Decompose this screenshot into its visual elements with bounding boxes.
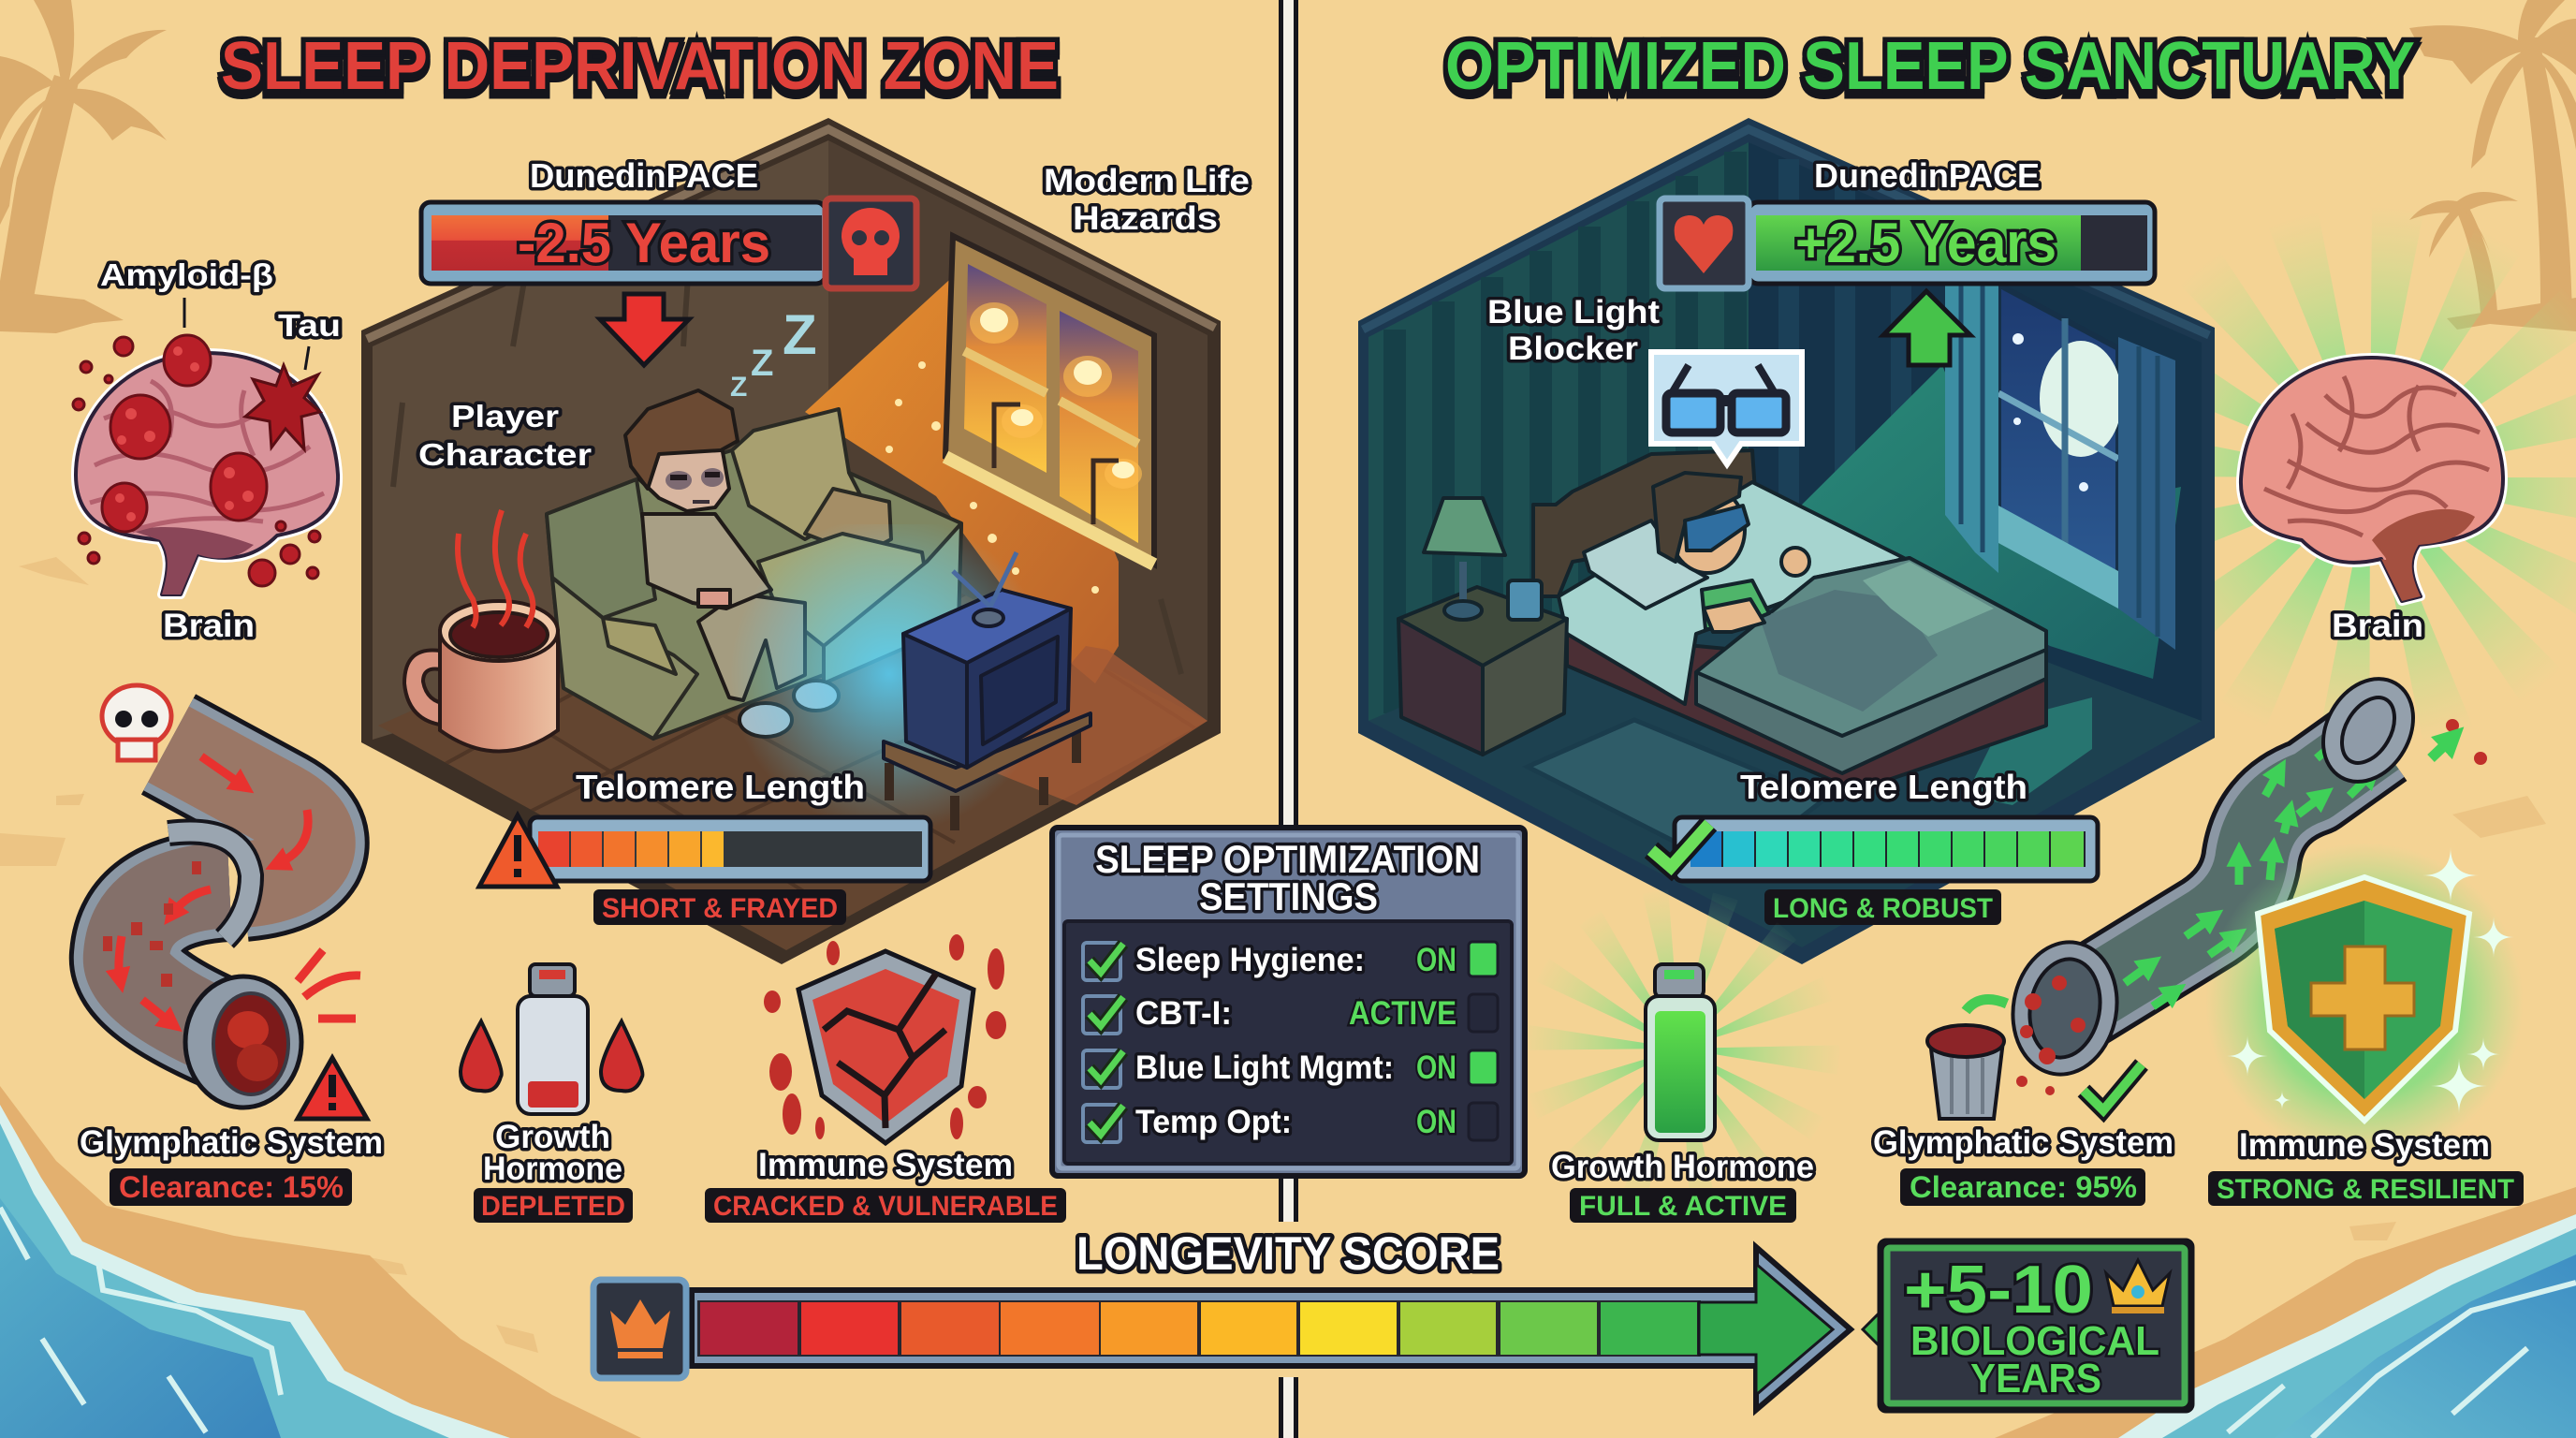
immune system label right: Immune System bbox=[2239, 1127, 2490, 1164]
row: cbt-i bbox=[1083, 994, 1498, 1034]
dunedinpace bar: minus 2.5 years: -2.5 Years bbox=[518, 212, 770, 274]
result panel: plus 5-10 biological years: BIOLOGICAL bbox=[1910, 1318, 2159, 1364]
sparkles bbox=[2227, 847, 2514, 1114]
icon: gold crown bbox=[2106, 1260, 2170, 1313]
right palm trees bbox=[2409, 0, 2576, 331]
growth hormone label left: Growth bbox=[495, 1119, 610, 1155]
pipe outlet clogged bbox=[185, 976, 301, 1108]
immune system label left: Immune System bbox=[758, 1147, 1013, 1183]
green check bbox=[2084, 1064, 2142, 1110]
bed bbox=[1533, 450, 2046, 796]
telomere label left: Telomere Length bbox=[576, 768, 865, 806]
blue light blocker label: Blue Light bbox=[1487, 294, 1660, 330]
tau label: Tau bbox=[278, 308, 341, 343]
arrow: up bbox=[1883, 291, 1970, 365]
tv glow bbox=[730, 524, 1048, 833]
blue light blocker label bbox=[1487, 294, 1660, 367]
left palm tree bbox=[0, 0, 167, 333]
growth hormone label right: Growth Hormone bbox=[1551, 1149, 1814, 1185]
player character label: Character bbox=[418, 437, 592, 472]
telomere label right: Telomere Length bbox=[1740, 768, 2027, 806]
sofa bbox=[547, 409, 961, 739]
telomere bar: short bbox=[479, 815, 930, 887]
amyloid plaques bbox=[73, 335, 320, 586]
panel: sleep optimization settings bbox=[1052, 828, 1525, 1176]
glymphatic label left: Glymphatic System bbox=[80, 1124, 383, 1161]
row: temp opt: Temp Opt: bbox=[1135, 1104, 1292, 1140]
bedside lamp and nightstand bbox=[1398, 498, 1567, 755]
sleepy z letters: Z bbox=[783, 303, 817, 366]
growth hormone label left: Hormone bbox=[483, 1151, 622, 1187]
resilient shield bbox=[2205, 843, 2524, 1161]
amyloid-beta label: Amyloid-β bbox=[100, 257, 273, 292]
player character bbox=[625, 390, 839, 737]
icon: heart bbox=[1675, 215, 1733, 273]
dunedinpace bar: plus 2.5 years bbox=[1660, 198, 2155, 288]
growth hormone label left bbox=[483, 1119, 622, 1187]
dunedinpace label right: DunedinPACE bbox=[1814, 156, 2040, 195]
sleepy z letters: Z bbox=[751, 343, 773, 384]
center divider bbox=[1279, 0, 1298, 1438]
brain with plaques bbox=[73, 335, 338, 594]
panel: optimized isometric room bbox=[1358, 118, 2215, 964]
icon: warning bbox=[479, 815, 557, 887]
row: blue light mgmt: Blue Light Mgmt: bbox=[1135, 1049, 1394, 1086]
brain label: left: Brain bbox=[163, 608, 255, 644]
clearance 95 tag: Clearance: 95% bbox=[1910, 1170, 2137, 1204]
longevity bar bbox=[593, 1247, 1851, 1410]
sleepy z letters bbox=[730, 303, 817, 403]
icon: crown start bbox=[593, 1280, 686, 1378]
glymphatic label right: Glymphatic System bbox=[1873, 1124, 2174, 1161]
arrow: down bbox=[600, 294, 689, 365]
settings title: SETTINGS bbox=[1199, 874, 1378, 918]
dunedinpace label: left: DunedinPACE bbox=[530, 156, 758, 195]
row: blue light mgmt: ON bbox=[1416, 1049, 1456, 1086]
panel: deprivation isometric room bbox=[361, 118, 1221, 964]
modern life hazards label: Modern Life bbox=[1044, 163, 1250, 199]
night window bbox=[1998, 285, 2122, 609]
row: cbt-i: ACTIVE bbox=[1349, 995, 1456, 1032]
glymphatic pipe: flowing bbox=[2012, 675, 2487, 1095]
row: temp opt: ON bbox=[1416, 1104, 1456, 1140]
title: sleep deprivation zone: SLEEP DEPRIVATION ZONE bbox=[221, 29, 1059, 104]
tau tangle bbox=[245, 365, 320, 449]
longevity score heading: LONGEVITY SCORE bbox=[1076, 1227, 1500, 1280]
sleeping character bbox=[1653, 473, 1809, 632]
water: right shore bbox=[1995, 1187, 2576, 1438]
orange window light bbox=[805, 261, 1119, 683]
glymphatic pipe: clogged bbox=[103, 744, 313, 1041]
row: sleep hygiene: Sleep Hygiene: bbox=[1135, 942, 1365, 978]
short and frayed tag: SHORT & FRAYED bbox=[602, 893, 838, 924]
icon: skull bbox=[842, 208, 900, 275]
beach patches bbox=[0, 557, 2546, 1353]
long and robust tag: LONG & ROBUST bbox=[1773, 893, 1993, 924]
result panel: plus 5-10 biological years: YEARS bbox=[1970, 1356, 2101, 1401]
rug bbox=[1528, 720, 1825, 871]
clearance 15 tag: Clearance: 15% bbox=[119, 1170, 344, 1204]
cracked shield bbox=[764, 934, 1006, 1143]
sleepy z letters: Z bbox=[730, 372, 747, 403]
row: sleep hygiene: ON bbox=[1416, 942, 1456, 978]
player character label: Player bbox=[451, 399, 559, 433]
row: cbt-i: CBT-I: bbox=[1135, 995, 1232, 1032]
player character label bbox=[418, 399, 592, 472]
result panel: plus 5-10 biological years: +5-10 bbox=[1904, 1253, 2093, 1328]
tv on table bbox=[884, 552, 1090, 830]
cracked and vulnerable tag: CRACKED & VULNERABLE bbox=[713, 1191, 1058, 1222]
row: sleep hygiene bbox=[1083, 942, 1498, 980]
tau label bbox=[278, 308, 341, 370]
brain healthy bbox=[2241, 358, 2503, 601]
coffee mug bbox=[404, 510, 558, 751]
growth hormone vial depleted bbox=[461, 964, 643, 1114]
window with street lamps bbox=[945, 236, 1154, 565]
icon: warning triangle and debris bbox=[298, 950, 367, 1119]
row: blue light mgmt bbox=[1083, 1049, 1498, 1088]
moonlight beam bbox=[1801, 365, 2181, 679]
dunedinpace bar: plus 2.5 years: +2.5 Years bbox=[1795, 212, 2056, 274]
row: temp opt bbox=[1083, 1103, 1498, 1142]
icon: check bbox=[1651, 824, 1709, 867]
telomere bar: long bbox=[1651, 817, 2098, 881]
settings title bbox=[1095, 837, 1480, 918]
trash can bbox=[1927, 1000, 2007, 1119]
modern life hazards label: Hazards bbox=[1073, 200, 1218, 237]
dunedinpace bar: minus 2.5 years bbox=[421, 198, 916, 288]
strong and resilient tag: STRONG & RESILIENT bbox=[2217, 1174, 2514, 1205]
water: left shore bbox=[0, 1086, 641, 1438]
icon: skull marker bbox=[102, 685, 171, 760]
modern life hazards label bbox=[1044, 163, 1250, 237]
result panel: plus 5-10 biological years bbox=[1863, 1242, 2190, 1409]
glow rays behind right brain bbox=[2234, 342, 2506, 613]
full and active tag: FULL & ACTIVE bbox=[1579, 1191, 1787, 1222]
growth hormone vial full bbox=[1601, 964, 1760, 1140]
blue light blocker label: Blocker bbox=[1508, 330, 1638, 367]
depleted tag: DEPLETED bbox=[481, 1191, 625, 1222]
speech bubble with glasses bbox=[1651, 352, 1802, 464]
curtains bbox=[1945, 271, 2175, 650]
title: optimized sleep sanctuary: OPTIMIZED SLEEP SANCTUARY bbox=[1445, 29, 2415, 104]
settings title: SLEEP OPTIMIZATION bbox=[1095, 837, 1480, 881]
brain label right: Brain bbox=[2332, 608, 2423, 644]
